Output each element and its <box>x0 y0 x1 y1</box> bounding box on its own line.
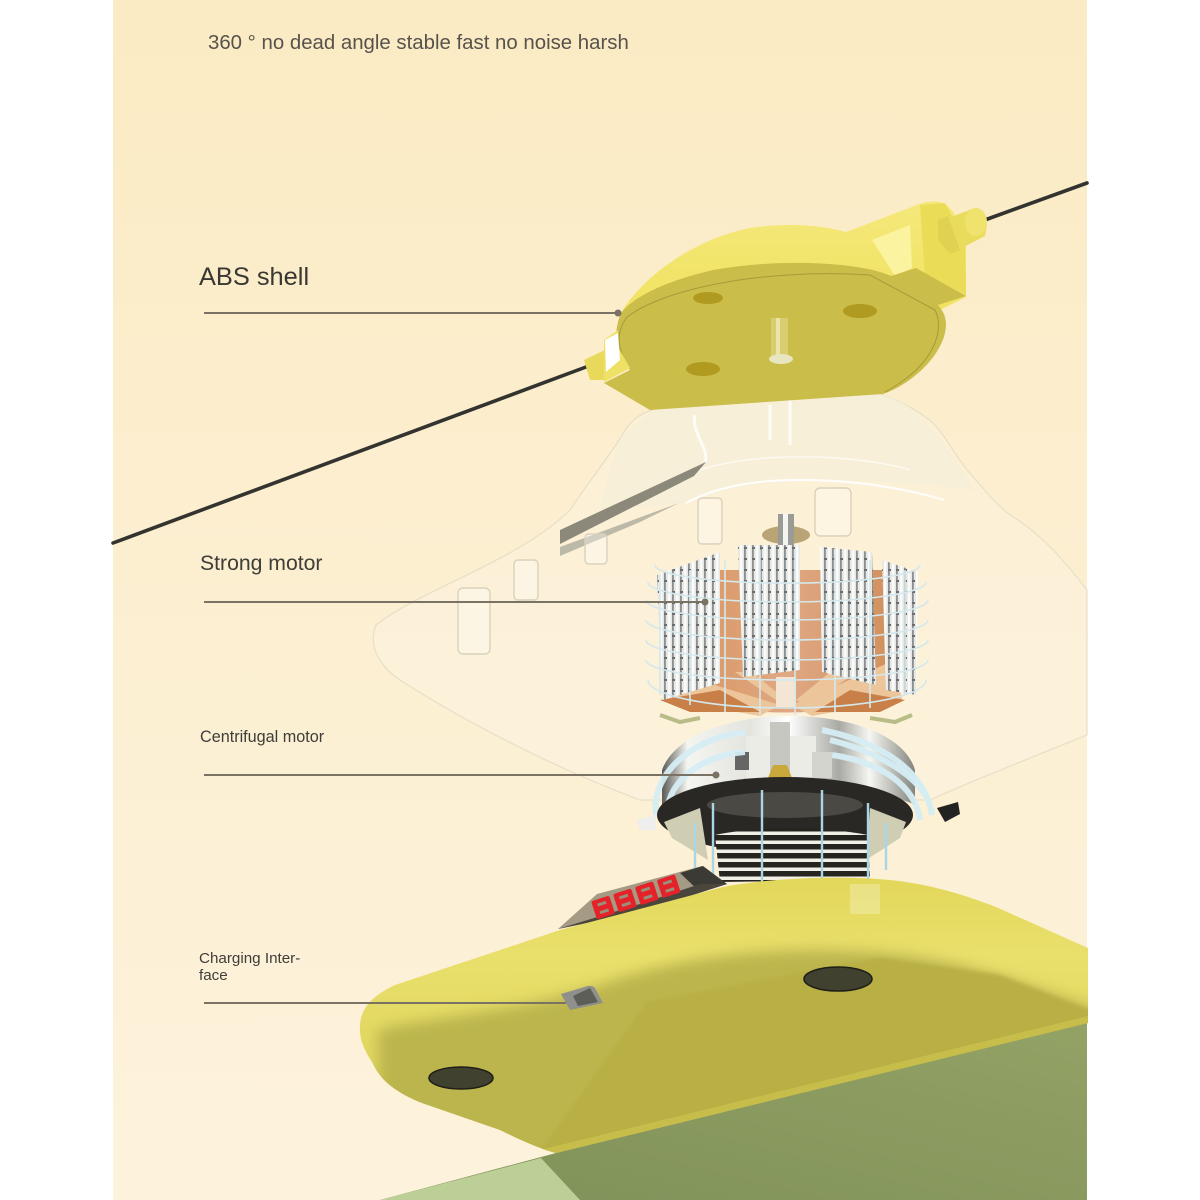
ribbed stator <box>715 828 870 882</box>
charging port <box>561 986 603 1010</box>
strong motor rotor <box>646 514 928 722</box>
copper blades <box>668 660 902 716</box>
green clips <box>660 715 912 722</box>
foot pads <box>429 967 872 1089</box>
shell dome <box>621 201 966 340</box>
base body <box>360 878 1088 1153</box>
ring central block <box>735 722 832 784</box>
label: ABS shell <box>199 263 622 316</box>
base underside <box>372 884 1088 1153</box>
power cord <box>113 183 1087 543</box>
transparent cover <box>373 380 1087 800</box>
rotor wire lines <box>646 550 928 715</box>
right connector <box>938 208 987 254</box>
side tabs <box>637 802 960 830</box>
dark underside <box>657 777 913 853</box>
left connector <box>584 330 630 382</box>
red digits <box>591 874 681 919</box>
label: Charging Interface <box>199 950 566 1003</box>
cover reflection wedge <box>560 462 706 556</box>
green floor <box>380 1023 1087 1200</box>
rotor fins <box>657 552 720 700</box>
centrifugal motor <box>637 716 960 882</box>
copper core <box>670 570 905 712</box>
airflow rings <box>656 730 932 820</box>
label: Charging Interface: Charging Inter- <box>199 950 300 967</box>
shell post <box>769 318 793 364</box>
label: Strong motor: Strong motor <box>200 552 322 575</box>
display panel <box>558 866 727 929</box>
label: ABS shell: ABS shell <box>199 263 309 291</box>
label: Charging Interface: face <box>199 967 228 984</box>
label: Strong motor <box>200 552 708 606</box>
rotor shaft <box>762 514 810 707</box>
base housing <box>360 866 1088 1153</box>
shell screw holes <box>686 292 877 376</box>
heading: 360 ° no dead angle stable fast no noise harsh <box>208 32 629 54</box>
shell underside <box>604 263 966 410</box>
label: Centrifugal motor <box>200 728 720 778</box>
blue rods <box>695 790 886 882</box>
ABS shell <box>584 201 987 410</box>
cover pegs <box>458 488 851 654</box>
ring body <box>662 716 915 805</box>
label: Centrifugal motor: Centrifugal motor <box>200 728 325 746</box>
